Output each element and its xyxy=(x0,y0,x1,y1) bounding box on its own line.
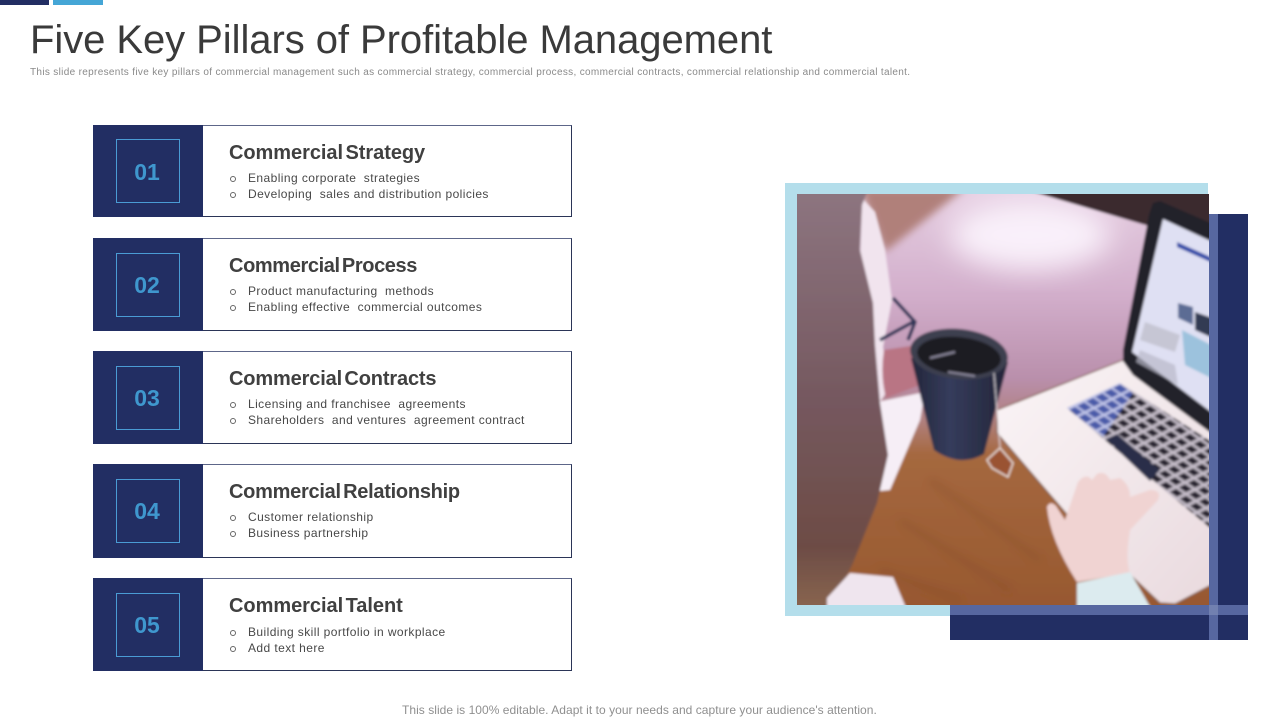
laptop screen xyxy=(1123,201,1215,436)
bullet list: relationship xyxy=(230,510,374,540)
subtitle: This slide represents five key pillars of commercial management such as commercial strategy, commercial process, commercial contracts, commercial relationship and commercial talent. xyxy=(30,67,910,78)
bullet list: relationship: Customer relationship xyxy=(248,510,374,524)
heading: commercial process: Commercial Process xyxy=(229,255,417,277)
footer note: This slide is 100% editable. Adapt it to your needs and capture your audience's attention. xyxy=(402,703,877,717)
bullet list: contracts: Shareholders and ventures agreement contract xyxy=(248,413,525,427)
light blue frame xyxy=(785,183,1208,616)
bullet list: contracts xyxy=(230,397,525,427)
navy backing frame xyxy=(950,214,1248,640)
bullet list: strategy xyxy=(230,171,489,201)
number badge 04 xyxy=(116,479,180,543)
panel: commercial contracts xyxy=(93,351,572,444)
right sleeve xyxy=(1077,572,1152,610)
left sleeve xyxy=(827,573,907,610)
heading: commercial contracts: Commercial Contracts xyxy=(229,368,436,390)
bullet list: relationship: Business partnership xyxy=(248,526,368,540)
bullet list: process: Product manufacturing methods xyxy=(248,284,434,298)
glasses xyxy=(880,298,915,340)
bullet list: strategy: Developing sales and distribution policies xyxy=(248,187,489,201)
number badge 03: 03 xyxy=(134,385,160,411)
number badge 02: 02 xyxy=(134,272,160,298)
photo: person with mug at a laptop xyxy=(790,188,1215,610)
number badge 03 xyxy=(116,366,180,430)
title: Five Key Pillars of Profitable Management xyxy=(30,18,772,62)
tea bag tag xyxy=(987,373,1013,477)
heading: commercial strategy: Commercial Strategy xyxy=(229,142,425,164)
panel: commercial strategy xyxy=(93,125,572,217)
number badge 05: 05 xyxy=(134,612,160,638)
number badge 05 xyxy=(116,593,180,657)
number badge 02 xyxy=(116,253,180,317)
bullet list: talent: Add text here xyxy=(248,641,325,655)
wood table xyxy=(845,194,1209,605)
laptop base xyxy=(997,360,1215,604)
bullet list: contracts: Licensing and franchisee agreements xyxy=(248,397,466,411)
number badge 01: 01 xyxy=(134,159,160,185)
hand holding mug xyxy=(882,345,920,398)
heading: commercial talent: Commercial Talent xyxy=(229,595,403,617)
bullet list: talent: Building skill portfolio in workplace xyxy=(248,625,446,639)
bullet list: process: Enabling effective commercial outcomes xyxy=(248,300,482,314)
dark background xyxy=(1035,194,1209,227)
keyboard xyxy=(1067,383,1215,532)
hair xyxy=(790,190,888,610)
number badge 04: 04 xyxy=(134,498,160,524)
panel: commercial talent xyxy=(93,578,572,671)
bullet list: process xyxy=(230,284,482,314)
top accent bars xyxy=(0,0,103,5)
face xyxy=(860,198,892,402)
heading: commercial relationship: Commercial Relationship xyxy=(229,481,460,503)
bullet list: strategy: Enabling corporate strategies xyxy=(248,171,420,185)
mug xyxy=(908,324,1010,460)
notebook xyxy=(877,392,925,491)
panel: commercial process xyxy=(93,238,572,331)
number badge 01 xyxy=(116,139,180,203)
panel: commercial relationship xyxy=(93,464,572,558)
photo panel with frames xyxy=(785,183,1248,640)
bullet list: talent xyxy=(230,625,446,655)
hand on trackpad xyxy=(1047,473,1159,582)
